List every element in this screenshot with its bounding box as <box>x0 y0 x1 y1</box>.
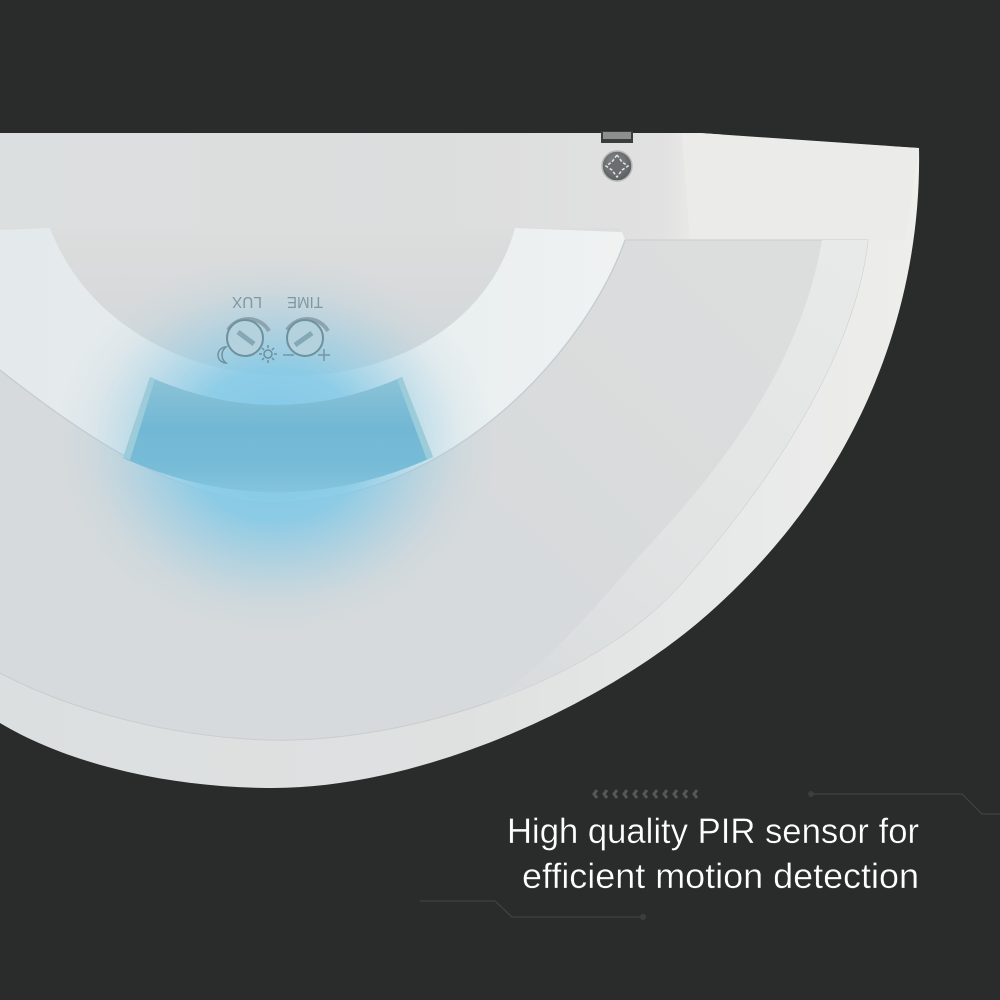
diffuser <box>0 240 868 740</box>
lamp outer rim <box>0 130 930 800</box>
PIR sensor window <box>123 377 433 492</box>
caption <box>507 812 919 896</box>
sensor side bevels <box>123 377 155 460</box>
minus and plus marks <box>283 349 330 361</box>
moon icon <box>218 347 226 363</box>
TIME dial <box>283 293 330 361</box>
caption line 1: High quality PIR sensor for <box>507 812 919 851</box>
wall lamp <box>0 130 930 800</box>
blue glow <box>86 285 466 604</box>
infographic canvas <box>0 131 1000 920</box>
LUX knob <box>227 320 263 356</box>
recess shading <box>134 290 484 352</box>
LUX arc <box>228 319 269 331</box>
screw <box>602 151 632 181</box>
decorative circuit line: bottom <box>420 901 646 920</box>
caption line 2: efficient motion detection <box>522 857 919 896</box>
top mounting panel <box>700 133 723 135</box>
TIME knob <box>287 320 323 356</box>
lens edge highlight <box>0 240 625 503</box>
TIME label: TIME <box>287 293 323 310</box>
TIME arc <box>287 319 328 331</box>
sun icon <box>259 345 277 363</box>
LUX dial <box>218 293 277 363</box>
diffuser stepped edge <box>490 240 868 702</box>
sensor lens band <box>0 228 625 468</box>
decorative circuit line: top right <box>808 791 1000 814</box>
decorative chevrons <box>594 790 697 798</box>
right bracket surface <box>870 144 917 148</box>
mounting clip <box>601 131 633 143</box>
LUX label: LUX <box>232 293 262 310</box>
